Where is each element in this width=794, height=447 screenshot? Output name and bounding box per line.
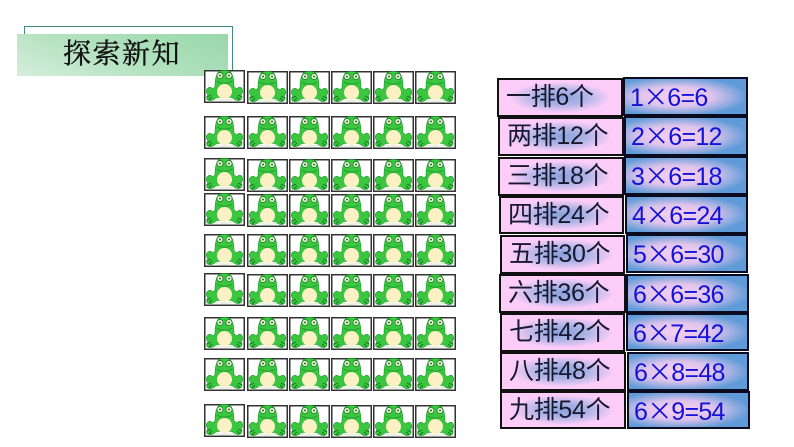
heading outline frame [24, 26, 233, 74]
frog row 2 [205, 116, 455, 148]
heading text: 探索新知 [63, 39, 181, 70]
label: 六排36个: 六排36个 [508, 279, 609, 307]
label: 四排24个 [499, 196, 624, 234]
formula: 4×6=24 [625, 195, 748, 234]
heading green gradient bar [17, 34, 228, 76]
frog row 9 [205, 404, 455, 437]
frog row 6 [205, 273, 455, 306]
label: 一排6个: 一排6个 [506, 83, 594, 111]
formula: 6×6=36 [626, 274, 749, 313]
label: 三排18个: 三排18个 [507, 162, 608, 190]
formula: 6×9=54: 6×9=54 [634, 392, 725, 428]
formula: 2×6=12 [624, 116, 748, 156]
formula: 6×8=48 [627, 352, 749, 391]
label: 九排54个 [500, 391, 626, 429]
formula: 1×6=6 [623, 77, 748, 116]
label: 四排24个: 四排24个 [508, 201, 609, 229]
formula: 5×6=30 [626, 234, 748, 273]
formula: 3×6=18 [624, 156, 748, 195]
formula: 6×9=54 [627, 391, 750, 429]
label: 五排30个: 五排30个 [509, 240, 610, 268]
frog row 8 [205, 358, 455, 390]
formula: 6×8=48: 6×8=48 [634, 353, 725, 389]
label: 五排30个 [500, 235, 625, 274]
label: 六排36个 [499, 274, 626, 313]
label: 八排48个: 八排48个 [509, 357, 610, 385]
frog row 7 [205, 317, 455, 349]
label: 八排48个 [500, 352, 626, 391]
heading: 探索新知 banner [17, 26, 233, 76]
formula: 1×6=6: 1×6=6 [630, 78, 708, 114]
frog row 3 [205, 158, 455, 191]
formula: 6×7=42: 6×7=42 [633, 314, 724, 350]
frog row 5 [205, 234, 455, 266]
label: 一排6个 [497, 78, 623, 117]
frog row 4 [205, 193, 455, 226]
panel: rows and multiplication table [497, 77, 750, 429]
formula: 3×6=18: 3×6=18 [631, 157, 722, 193]
formula: 6×7=42 [626, 313, 749, 351]
formula: 6×6=36: 6×6=36 [633, 275, 724, 311]
label: 九排54个: 九排54个 [509, 396, 610, 424]
label: 三排18个 [498, 157, 624, 196]
formula: 5×6=30: 5×6=30 [633, 235, 724, 271]
label: 七排42个 [500, 313, 625, 352]
frog row 1 [205, 70, 455, 103]
formula: 2×6=12: 2×6=12 [631, 117, 722, 153]
label: 两排12个 [498, 117, 624, 156]
formula: 4×6=24: 4×6=24 [632, 196, 723, 232]
label: 两排12个: 两排12个 [507, 122, 608, 150]
label: 七排42个: 七排42个 [509, 318, 610, 346]
